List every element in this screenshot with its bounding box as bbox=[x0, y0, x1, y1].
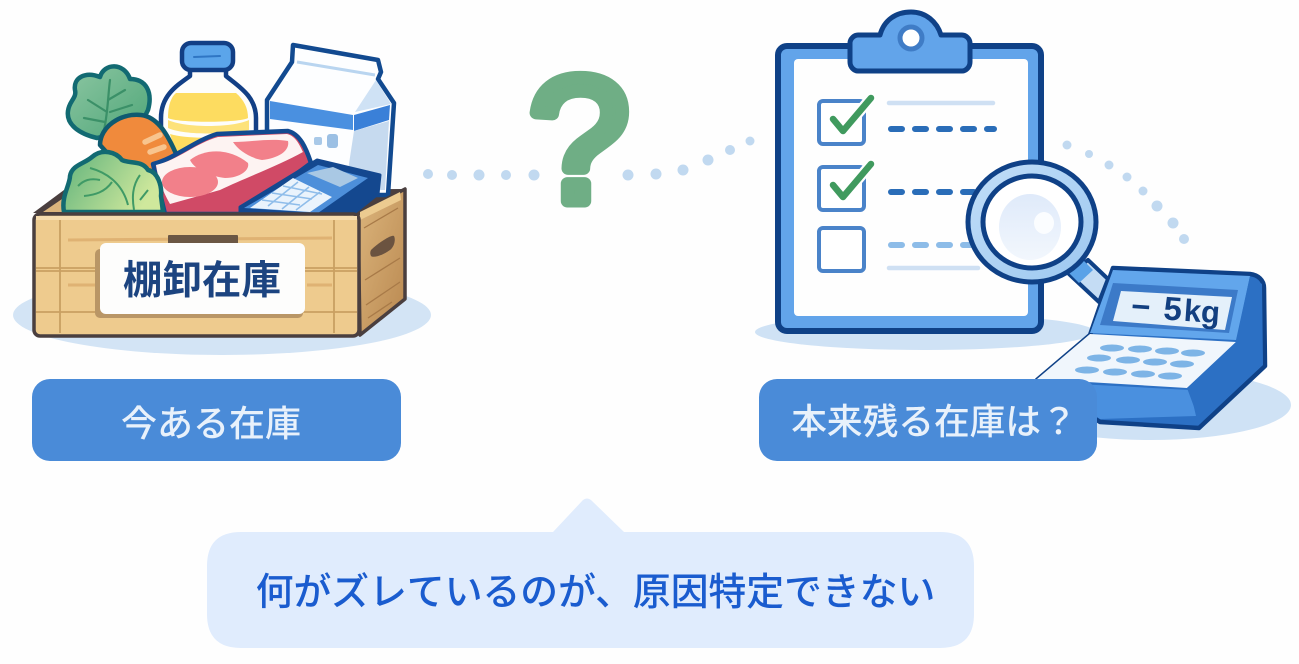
pill: 今ある在庫 bbox=[32, 379, 401, 461]
question mark: ? bbox=[529, 41, 629, 239]
dotted connector: left to question mark bbox=[423, 169, 540, 180]
icon: bottle bbox=[161, 43, 256, 180]
scale readout: − 5kg bbox=[1130, 287, 1221, 330]
label: 棚卸在庫 bbox=[100, 243, 305, 314]
illustration: clipboard, magnifier and scale bbox=[755, 12, 1291, 440]
icon: leafy greens bbox=[68, 66, 150, 138]
crate inner wall bbox=[43, 199, 62, 212]
icon: milk carton bbox=[267, 45, 394, 195]
pill: 今ある在庫: 今ある在庫 bbox=[121, 403, 301, 444]
dotted connector: magnifier to scale bbox=[1062, 140, 1189, 244]
icon: lettuce bbox=[63, 152, 163, 212]
clipboard board bbox=[778, 46, 1041, 331]
crate handle hole bbox=[370, 236, 395, 257]
crate slats bbox=[36, 218, 357, 333]
checklist row 3 bbox=[819, 228, 978, 271]
crate rim bbox=[360, 192, 401, 220]
dotted connector: question mark to clipboard bbox=[622, 136, 754, 180]
crate wood grain bbox=[364, 208, 400, 318]
scale shadow bbox=[1009, 370, 1291, 440]
icon: meat bbox=[153, 131, 311, 214]
crate front bbox=[34, 214, 359, 336]
crate slot bbox=[168, 235, 238, 244]
illustration: inventory crate bbox=[13, 43, 431, 355]
crate side panel bbox=[358, 189, 405, 335]
checklist row 1 bbox=[819, 98, 994, 144]
clipboard paper bbox=[794, 59, 1028, 316]
label: 棚卸在庫: 棚卸在庫 bbox=[123, 259, 281, 303]
callout: 何がズレているのが、原因特定できない bbox=[256, 572, 935, 614]
pill: 本来残る在庫は？ bbox=[759, 379, 1097, 461]
icon: calculator bbox=[240, 160, 380, 214]
scale bbox=[1037, 268, 1265, 428]
icon: carrot bbox=[100, 115, 177, 172]
clipboard shadow bbox=[755, 314, 1095, 350]
crate shadow bbox=[13, 275, 431, 355]
callout bbox=[207, 498, 974, 648]
crate back interior bbox=[33, 189, 405, 214]
clipboard clip bbox=[850, 12, 970, 71]
magnifier bbox=[968, 162, 1108, 302]
label backing bbox=[95, 249, 303, 318]
checklist row 2 bbox=[819, 164, 974, 210]
pill: 本来残る在庫は？: 本来残る在庫は？ bbox=[791, 402, 1077, 442]
